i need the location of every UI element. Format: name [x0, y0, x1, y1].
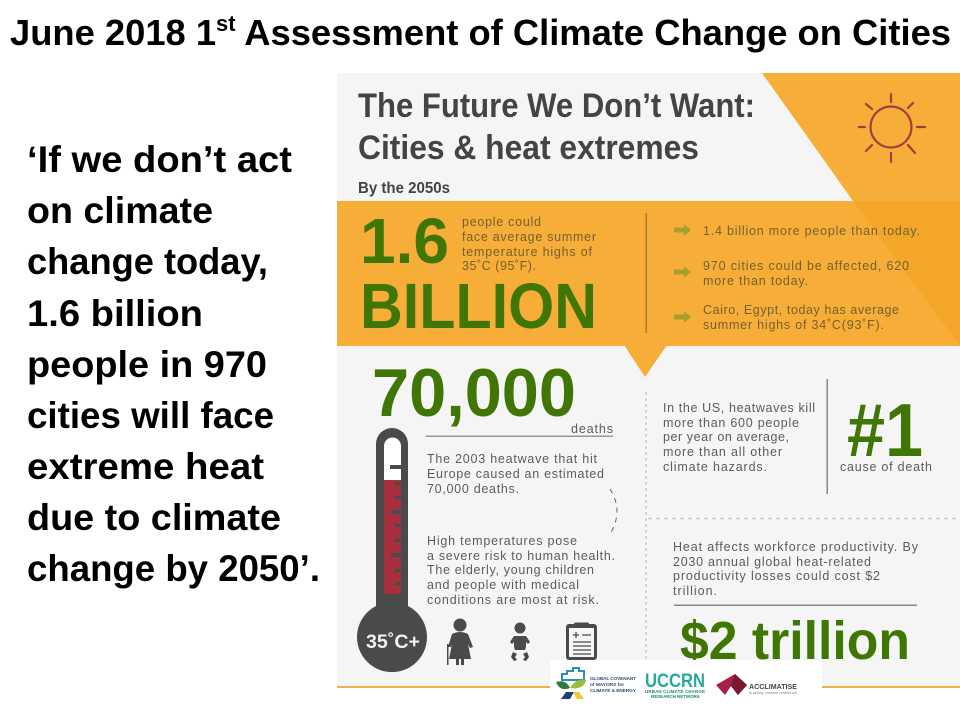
quote text block: ‘If we don’t act — [27, 139, 292, 180]
productivity text: Heat affects workforce productivity. By — [673, 540, 919, 554]
icon: thermometer — [357, 428, 427, 672]
title: st — [216, 11, 236, 36]
bullet list: Cairo, Egypt, today has average — [703, 303, 899, 317]
subheading: By the 2050s — [358, 180, 450, 197]
health risk text: and people with medical — [427, 578, 579, 592]
arrows — [674, 224, 691, 323]
deaths label: deaths — [571, 422, 613, 436]
orange corner triangle — [762, 73, 960, 201]
bullet list: summer highs of 34˚C(93˚F). — [703, 318, 884, 332]
heading: Cities & heat extremes — [358, 129, 699, 167]
stat description — [462, 215, 596, 273]
quote text block: 1.6 billion — [27, 293, 203, 334]
bullet list: more than today. — [703, 274, 808, 288]
logo: UCCRN — [645, 671, 705, 699]
bullet list: 1.4 billion more people than today. — [703, 224, 920, 238]
quote text block: change today, — [27, 241, 268, 282]
title: Assessment of Climate Change on Cities — [236, 12, 951, 53]
quote text block: due to climate — [27, 497, 281, 538]
heatwave text: 70,000 deaths. — [427, 482, 519, 496]
quote text block: change by 2050’. — [27, 548, 320, 589]
heatwave text — [427, 452, 604, 496]
stat description: temperature highs of — [462, 245, 593, 259]
bullet list: 970 cities could be affected, 620 — [703, 259, 909, 273]
bullet list — [703, 224, 920, 332]
1.6 billion stat — [360, 205, 597, 342]
productivity text: productivity losses could cost $2 — [673, 569, 880, 583]
1.6 billion stat: BILLION — [360, 270, 597, 342]
health risk text: The elderly, young children — [427, 563, 594, 577]
productivity text: 2030 annual global heat-related — [673, 555, 871, 569]
US heatwave text: per year on average, — [663, 430, 789, 444]
logo: global covenant of mayors: of MAYORS for — [590, 682, 624, 688]
productivity text — [673, 540, 919, 598]
logo: Acclimatise: building climate resilience — [749, 691, 797, 695]
quote text block: people in 970 — [27, 344, 267, 385]
quote text block: extreme heat — [27, 446, 264, 487]
logo: UCCRN: URBAN CLIMATE CHANGE — [645, 689, 705, 694]
icon: sun — [859, 94, 925, 162]
health risk text: conditions are most at risk. — [427, 593, 599, 607]
heading — [358, 87, 755, 167]
US heatwave text: climate hazards. — [663, 460, 767, 474]
health risk text: a severe risk to human health. — [427, 549, 615, 563]
#1 stat: #1 — [847, 388, 923, 472]
heading: The Future We Don’t Want: — [358, 87, 755, 125]
stat description: 35˚C (95˚F). — [462, 259, 536, 273]
panel: partner logos — [550, 660, 822, 711]
70,000 stat: 70,000 — [372, 355, 576, 431]
cause of death label: cause of death — [840, 460, 932, 474]
icon: clipboard — [566, 622, 597, 660]
US heatwave text: more than all other — [663, 445, 782, 459]
US heatwave text: more than 600 people — [663, 416, 799, 430]
quote text block — [27, 139, 320, 589]
panel background — [337, 73, 960, 687]
1.6 billion stat: 1.6 — [360, 205, 449, 277]
logo: Acclimatise — [716, 674, 797, 695]
logo: global covenant of mayors — [556, 668, 637, 699]
logo: global covenant of mayors: GLOBAL COVENANT — [590, 676, 636, 682]
productivity text: trillion. — [673, 584, 717, 598]
icon: elderly person — [447, 618, 473, 665]
title: June 2018 1 — [10, 12, 217, 53]
logo: UCCRN: RESEARCH NETWORK — [651, 694, 701, 699]
health risk text: High temperatures pose — [427, 534, 577, 548]
$2 trillion stat: $2 trillion — [680, 611, 910, 671]
logo: global covenant of mayors: CLIMATE & ENERGY — [590, 688, 637, 694]
quote text block: cities will face — [27, 395, 274, 436]
icon: baby — [510, 622, 530, 661]
logo: UCCRN: UCCRN — [645, 671, 705, 692]
stat description: face average summer — [462, 230, 596, 244]
icon: thermometer: 35˚C+ — [366, 632, 420, 653]
panel: infographic — [337, 73, 960, 688]
quote text block: on climate — [27, 190, 213, 231]
US heatwave text: In the US, heatwaves kill — [663, 401, 815, 415]
heatwave text: Europe caused an estimated — [427, 467, 604, 481]
health risk text — [427, 534, 615, 607]
stat description: people could — [462, 215, 541, 229]
US heatwave text — [663, 401, 815, 474]
heatwave text: The 2003 heatwave that hit — [427, 452, 598, 466]
panel: orange banner — [337, 201, 960, 377]
logo: Acclimatise: ACCLIMATISE — [749, 682, 797, 691]
